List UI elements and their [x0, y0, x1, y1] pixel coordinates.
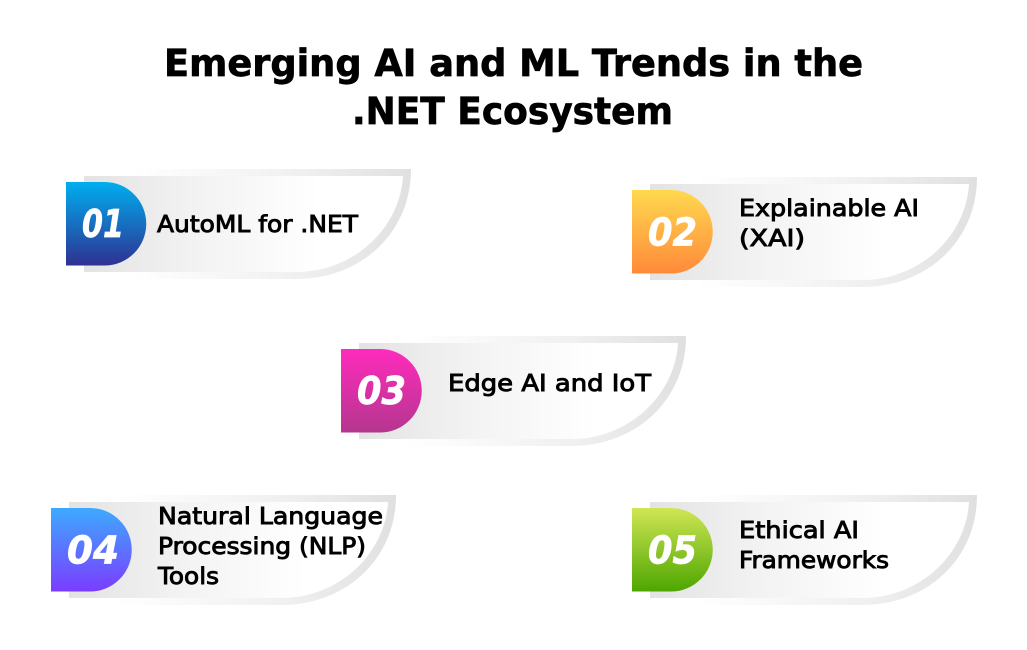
text: Ethical AI Frameworks: Frameworks	[739, 548, 889, 574]
badge: 02	[632, 190, 713, 274]
panel: 02 Explainable AI	[632, 177, 977, 287]
badge: 01	[66, 182, 146, 266]
title	[164, 42, 863, 133]
badge: 03: 03	[357, 369, 406, 413]
badge: 04: 04	[67, 528, 119, 572]
badge: 05	[632, 508, 713, 592]
text: Natural Language Processing (NLP) Tools: Tools	[157, 564, 219, 590]
badge: 03	[341, 349, 422, 432]
badge: 05: 05	[648, 528, 697, 572]
text: Edge AI and IoT: Edge AI and IoT	[448, 371, 652, 397]
text: Explainable AI (XAI)	[739, 196, 919, 252]
text: Natural Language Processing (NLP) Tools	[157, 504, 383, 590]
text: Natural Language Processing (NLP) Tools: Natural Language	[158, 504, 383, 530]
title: .NET Ecosystem	[352, 90, 673, 133]
panel: 01 AutoML for .NET	[66, 169, 411, 279]
text: Ethical AI Frameworks: Ethical AI	[739, 518, 859, 544]
text: Explainable AI (XAI): (XAI)	[739, 226, 805, 252]
text: Explainable AI (XAI): Explainable AI	[739, 196, 919, 222]
badge: 01: 01	[82, 202, 124, 246]
text: Natural Language Processing (NLP) Tools: Processing (NLP)	[158, 534, 366, 560]
title: Emerging AI and ML Trends in the	[164, 42, 863, 85]
text: AutoML for .NET: AutoML for .NET	[157, 212, 359, 238]
badge: 04	[51, 508, 132, 592]
panel: 03 Edge AI and IoT	[341, 336, 686, 446]
badge: 02: 02	[648, 210, 697, 254]
panel: 05 Ethical AI Frameworks	[632, 495, 977, 605]
panel: 04 Natural Language Processing (NLP) Tools	[51, 495, 396, 605]
text: Ethical AI Frameworks	[739, 518, 889, 574]
